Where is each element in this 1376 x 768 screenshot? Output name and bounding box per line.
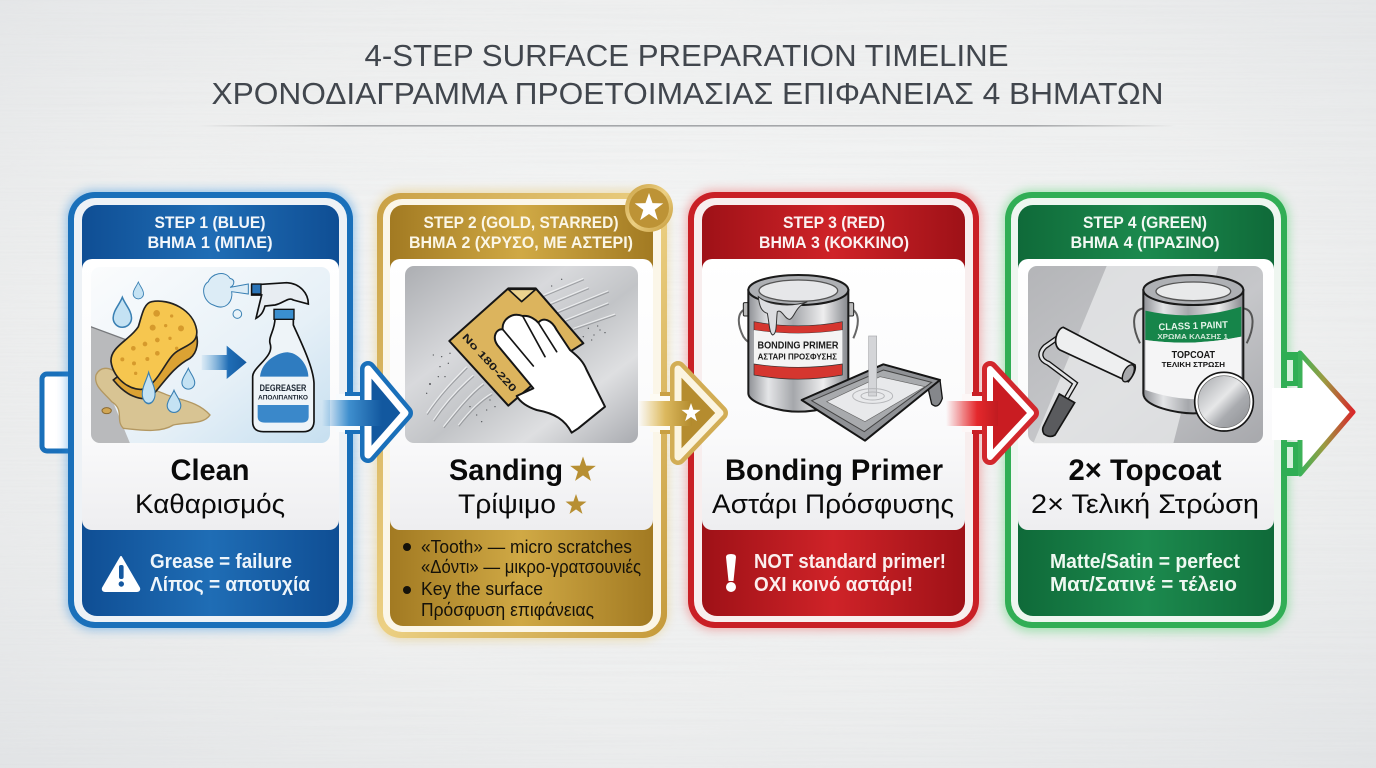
step 3 header <box>759 214 909 252</box>
step 3 note: ΟΧΙ κοινό αστάρι! <box>754 574 913 596</box>
illustration: roller and class 1 paint can: TOPCOAT <box>1172 350 1215 361</box>
illustration: roller and class 1 paint can: CLASS 1 PAINT <box>1158 320 1228 333</box>
illustration: roller and class 1 paint can: ΧΡΩΜΑ ΚΛΑΣΗΣ 1 <box>1157 332 1229 341</box>
arrow: step 1 to step 2 <box>322 369 405 455</box>
step 3 header: ΒΗΜΑ 3 (ΚΟΚΚΙΝΟ) <box>759 234 909 252</box>
step 1 header <box>148 214 272 252</box>
step 2 header: ΒΗΜΑ 2 (ΧΡΥΣΟ, ΜΕ ΑΣΤΕΡΙ) <box>409 234 633 252</box>
illustration: hand sanding with sandpaper: No 180-220 <box>459 332 519 395</box>
step 4 note: Ματ/Σατινέ = τέλειο <box>1050 574 1237 596</box>
title: 4-STEP SURFACE PREPARATION TIMELINE <box>364 38 1008 73</box>
step 4 note <box>1050 551 1240 596</box>
illustration: sponge and degreaser spray: DEGREASER <box>260 383 307 393</box>
step 2 header: STEP 2 (GOLD, STARRED) <box>424 214 618 232</box>
step 3 name: Αστάρι Πρόσφυσης <box>712 489 954 519</box>
step 3 note <box>754 551 946 596</box>
step 2 header <box>409 214 633 252</box>
step 2 bullets: «Tooth» — micro scratches <box>421 536 632 557</box>
step 1 note: Grease = failure <box>150 551 292 573</box>
step 2 name: Sanding <box>449 454 563 487</box>
icon: name stars <box>566 456 596 514</box>
illustration: sponge and degreaser spray: ΑΠΟΛΙΠΑΝΤΙΚΟ <box>258 395 308 402</box>
step 3 name <box>712 454 954 519</box>
title: ΧΡΟΝΟΔΙΑΓΡΑΜΜΑ ΠΡΟΕΤΟΙΜΑΣΙΑΣ ΕΠΙΦΑΝΕΙΑΣ 4 ΒΗΜΑΤΩΝ <box>212 76 1164 111</box>
bottle <box>253 318 314 432</box>
step 4 name: 2× Τελική Στρώση <box>1031 489 1259 519</box>
illustration: bonding primer can and tray <box>739 275 942 441</box>
icon: warning triangle <box>103 557 139 591</box>
illustration: bonding primer can and tray: ΑΣΤΑΡΙ ΠΡΟΣΦΥΣΗΣ <box>758 351 837 361</box>
step 3 header: STEP 3 (RED) <box>783 214 885 232</box>
step 2 bullets: «Δόντι» — μικρο-γρατσουνιές <box>421 556 641 577</box>
step 1 header: STEP 1 (BLUE) <box>154 214 266 232</box>
step 1 name: Clean <box>170 454 250 487</box>
step 4 header <box>1070 214 1220 252</box>
step 2 bullets: Key the surface <box>421 578 543 599</box>
illustration: hand sanding with sandpaper <box>426 278 616 433</box>
step 2 bullets: Πρόσφυση επιφάνειας <box>421 599 594 620</box>
illustration: roller and class 1 paint can <box>1033 266 1253 443</box>
step 1 note <box>150 551 311 596</box>
step 2 bullets <box>403 536 641 620</box>
panel: step 4 topcoat <box>1003 190 1289 632</box>
arrow: step 3 to step 4 <box>946 369 1031 457</box>
step 4 name <box>1031 454 1259 519</box>
step 2 name <box>449 454 563 519</box>
panel: step 3 bonding primer <box>686 190 981 630</box>
step 4 header: STEP 4 (GREEN) <box>1083 214 1207 232</box>
step 1 header: ΒΗΜΑ 1 (ΜΠΛΕ) <box>148 234 272 252</box>
illustration: sponge and degreaser spray <box>91 274 314 443</box>
panel: step 1 clean <box>66 190 355 630</box>
title <box>212 38 1164 111</box>
icon: exclamation mark <box>726 554 736 592</box>
step 4 note: Matte/Satin = perfect <box>1050 551 1240 573</box>
step 2 name: Τρίψιμο <box>458 489 556 519</box>
arrow: step 4 exit <box>1272 352 1353 476</box>
step 1 note: Λίπος = αποτυχία <box>150 574 311 596</box>
spray cloud <box>204 274 248 307</box>
step 1 name <box>135 454 285 519</box>
small arrow <box>202 346 247 379</box>
step 1 name: Καθαρισμός <box>135 489 285 519</box>
step 4 header: ΒΗΜΑ 4 (ΠΡΑΣΙΝΟ) <box>1070 234 1220 252</box>
panel: step 2 sanding <box>375 184 673 640</box>
icon: star badge <box>625 184 673 232</box>
step 3 name: Bonding Primer <box>725 454 943 487</box>
illustration: roller and class 1 paint can: ΤΕΛΙΚΗ ΣΤΡΩΣΗ <box>1162 360 1225 369</box>
arrow: step 2 to step 3 <box>638 369 720 457</box>
illustration: bonding primer can and tray: BONDING PRIMER <box>757 341 839 352</box>
step 3 note: NOT standard primer! <box>754 551 946 573</box>
left stub: timeline start <box>42 374 82 451</box>
step 4 name: 2× Topcoat <box>1068 454 1222 487</box>
